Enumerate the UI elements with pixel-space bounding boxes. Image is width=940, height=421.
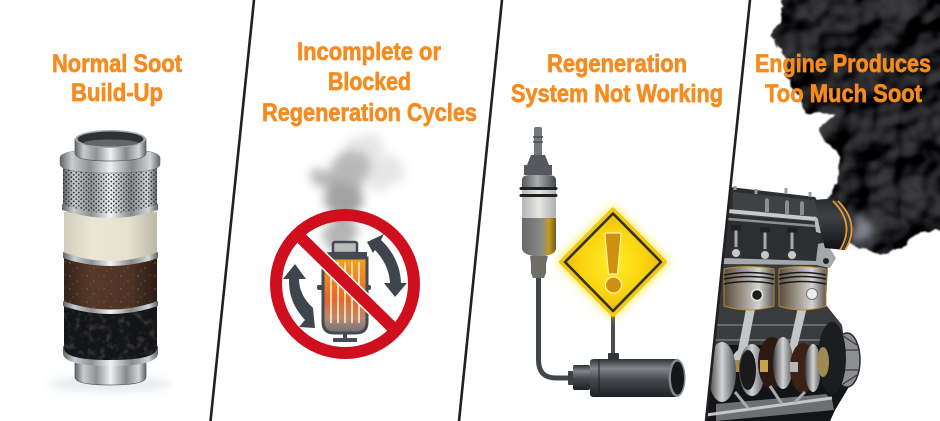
heading: incomplete or blocked regeneration cycles xyxy=(262,38,477,127)
heading: normal soot build-up: Normal Soot xyxy=(52,50,183,78)
engine block xyxy=(706,262,850,421)
prohibition sign xyxy=(276,215,414,353)
icon: prohibited filter regeneration xyxy=(276,215,414,353)
heading: incomplete or blocked regeneration cycles: Blocked xyxy=(328,68,411,96)
heading: incomplete or blocked regeneration cycles: Regeneration Cycles xyxy=(262,99,477,127)
oil pan rail xyxy=(706,386,834,421)
heading: engine produces too much soot xyxy=(755,50,931,108)
arrows: cycle xyxy=(283,234,407,328)
panel: engine produces too much soot xyxy=(706,0,940,421)
heading: regeneration system not working: Regeneration xyxy=(547,50,687,78)
panel: incomplete or blocked regeneration cycles xyxy=(262,38,477,353)
soot cloud xyxy=(774,0,940,254)
divider line 1 xyxy=(210,0,254,421)
panel: normal soot build-up xyxy=(48,50,183,392)
heading: normal soot build-up xyxy=(52,50,183,107)
icon: engine xyxy=(706,186,872,421)
warning connector wire xyxy=(611,314,615,354)
pistons xyxy=(724,266,826,310)
divider line 2 xyxy=(459,0,502,421)
heading: engine produces too much soot: Too Much Soot xyxy=(765,80,923,108)
sensor cable xyxy=(538,278,570,378)
filter unit xyxy=(317,242,371,342)
heading: regeneration system not working: System Not Working xyxy=(511,80,723,108)
icon: warning diamond xyxy=(558,207,668,318)
cylinder head xyxy=(723,187,828,262)
heading: normal soot build-up: Build-Up xyxy=(71,79,163,107)
icon: exhaust pipe xyxy=(568,353,686,397)
intake pipe with orange rings xyxy=(850,210,872,244)
icon: sensor xyxy=(520,127,558,278)
heading: regeneration system not working xyxy=(511,50,723,108)
flywheel gear xyxy=(817,322,860,394)
icon: layered filter cylinder xyxy=(48,130,172,392)
smoke plume xyxy=(310,135,403,250)
panel: regeneration system not working xyxy=(511,50,723,397)
heading: incomplete or blocked regeneration cycles: Incomplete or xyxy=(297,38,441,66)
crankshaft xyxy=(708,337,821,402)
connecting rods xyxy=(734,310,755,360)
divider line 3 xyxy=(706,0,750,421)
